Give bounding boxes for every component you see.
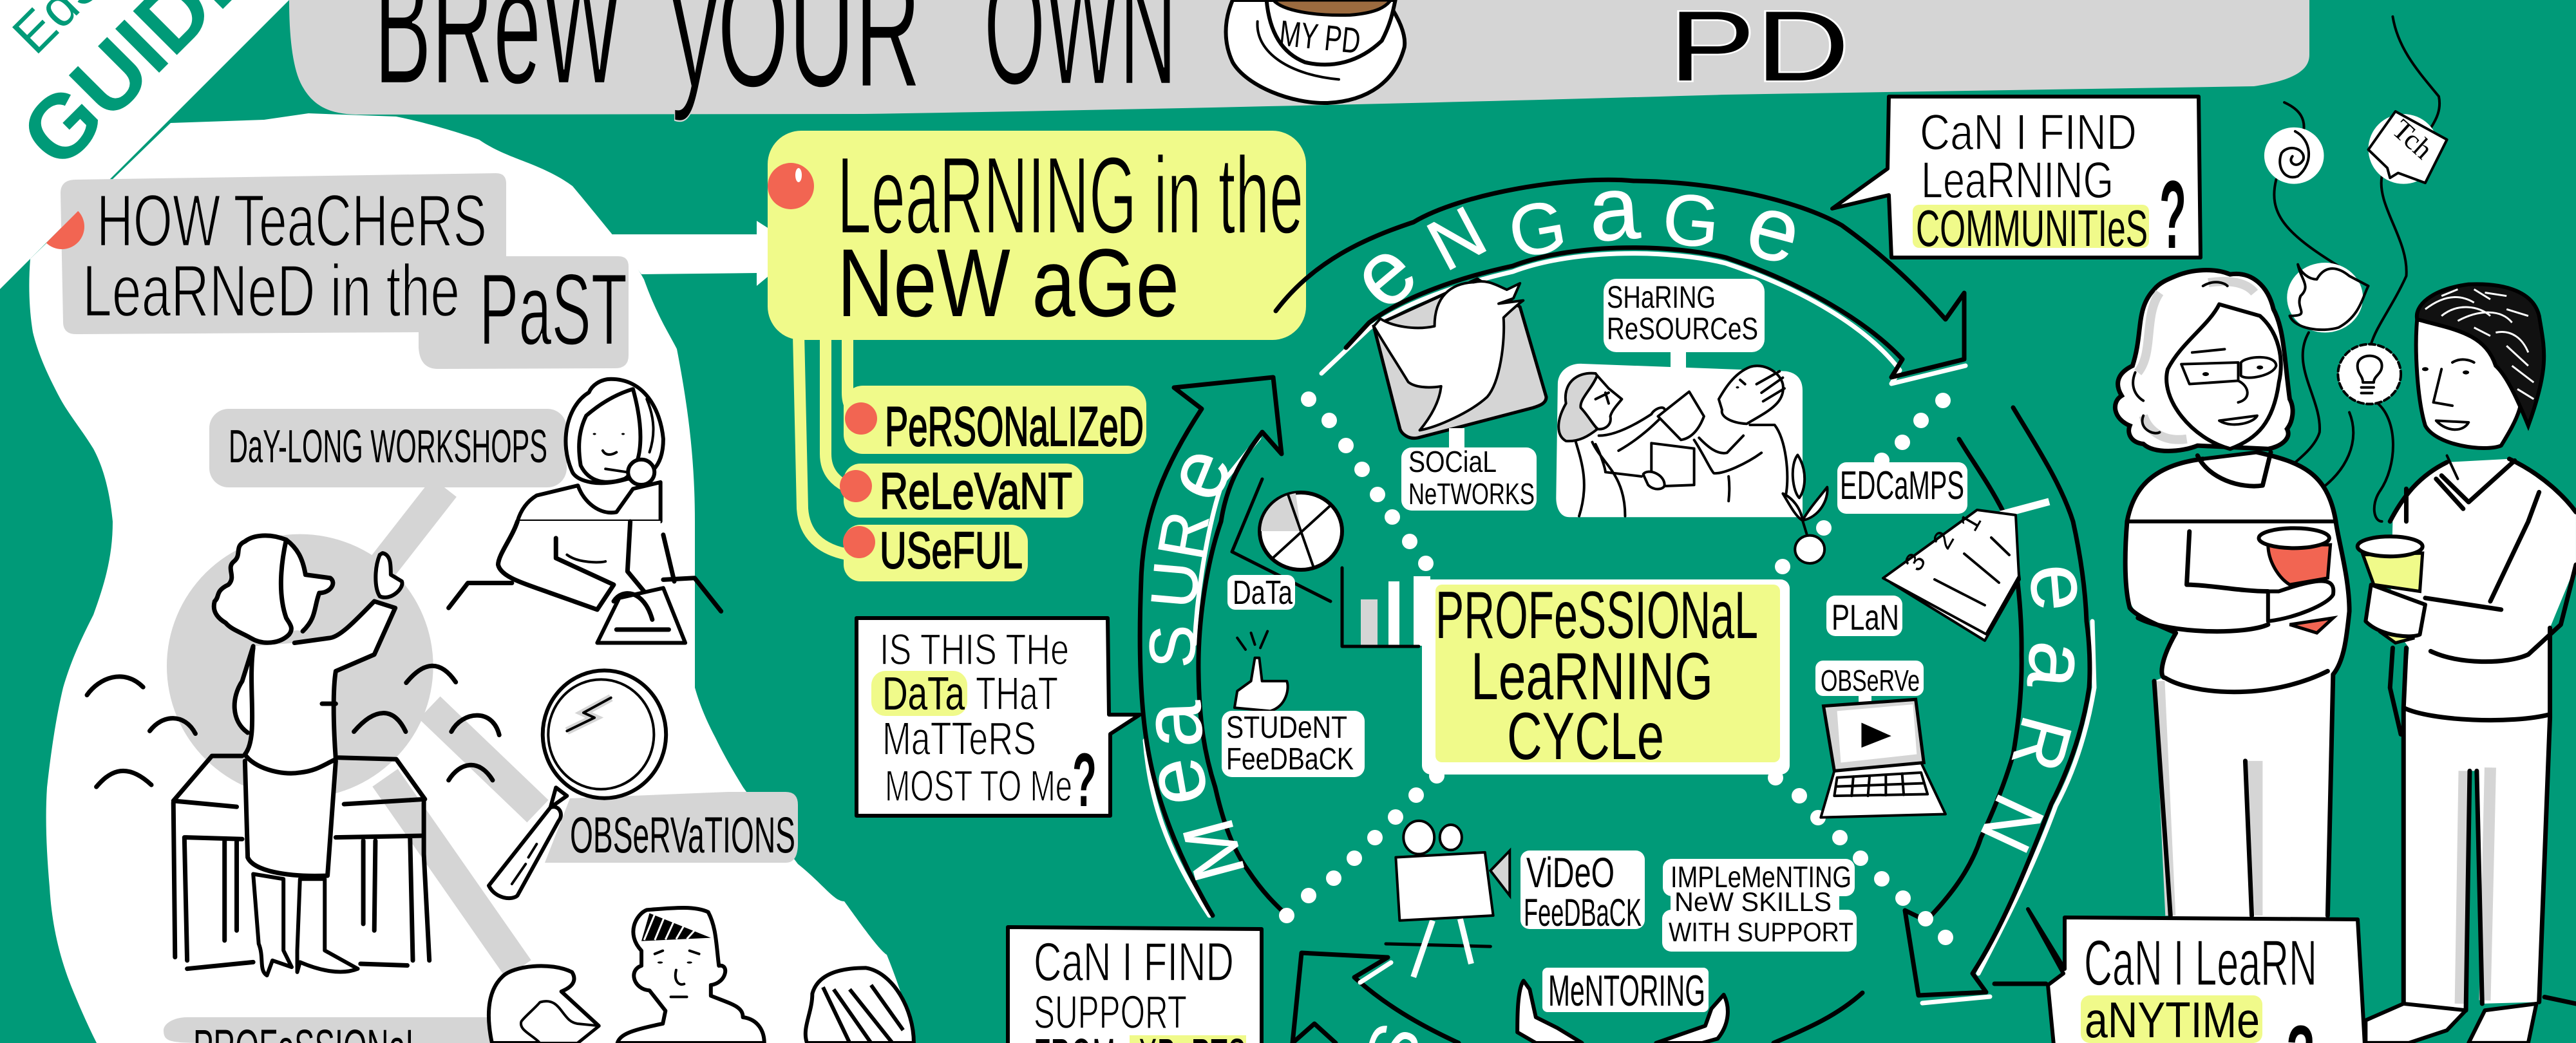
heading word past: PaST [479, 253, 627, 366]
list: useful [843, 522, 1028, 581]
arc letter a: a [1124, 699, 1220, 749]
arrow: past to new age [611, 221, 801, 286]
illustration: professional development audience [164, 908, 914, 1043]
student text: STUDeNT [1226, 711, 1347, 745]
feedback text: FeeDBaCK [1524, 891, 1642, 934]
question mark: ? [1072, 738, 1097, 823]
illustration: man holding yellow coffee cup [2358, 284, 2576, 1043]
label: implementing new skills with support [1662, 859, 1857, 952]
list: relevant [840, 462, 1083, 520]
heading: how teachers learned in the past [39, 173, 629, 369]
useful text: USeFUL [880, 522, 1023, 579]
line one: CaN I LeaRN [2084, 927, 2317, 999]
line two: LeaRNING [1921, 151, 2114, 209]
panel: professional learning cycle [1422, 578, 1790, 775]
icon: laptop with play button [1821, 699, 1946, 818]
label: data [1227, 574, 1295, 612]
icon: twitter tile [1374, 279, 1546, 438]
arc letter r: R [1996, 708, 2087, 780]
line three: MaTTeRS [882, 713, 1036, 765]
icons: floating social media bubbles with strings [2262, 17, 2447, 522]
grey circle behind teacher [167, 534, 433, 798]
label: day-long workshops [209, 409, 567, 487]
observations label [545, 792, 798, 863]
arc letter e: e [1332, 218, 1435, 328]
icon: numbered plan notebook [1883, 508, 2020, 641]
dotted cycle spokes [1279, 391, 1953, 945]
arrow: engage [1276, 156, 1965, 384]
arc letter a: a [1586, 156, 1643, 261]
line one: CaN I FIND [1034, 932, 1234, 992]
icon: video camera [1386, 821, 1510, 977]
bullet [840, 470, 872, 502]
line two: SUPPORT [1034, 987, 1187, 1038]
spiral bubble [2264, 127, 2324, 184]
callout: can i find support [1008, 927, 1262, 1043]
experts highlight [1130, 1035, 1246, 1043]
line three: COMMUNITIeS [1916, 200, 2148, 257]
line one: CaN I FIND [1920, 104, 2137, 160]
teacher figure [214, 536, 402, 975]
arc letter r: R [1144, 506, 1223, 565]
professional label [164, 1017, 489, 1043]
strings [2262, 17, 2439, 522]
cycle title line two: LeaRNING [1471, 639, 1713, 714]
word data: DaTa [882, 668, 965, 720]
new age heading line one: LeaRNING in the [837, 135, 1303, 257]
label: plan [1826, 596, 1902, 637]
video text: ViDeO [1526, 849, 1615, 896]
line two: NeW SKILLS [1674, 887, 1832, 917]
branches to list items [799, 335, 863, 555]
line four: MOST TO Me [885, 762, 1072, 811]
arrow: measure [1124, 377, 1289, 917]
illustration: two teachers sharing resources [1556, 364, 1803, 517]
arc letter e: e [1125, 751, 1226, 813]
red bullet [46, 211, 84, 249]
cycle title line three: CYCLe [1507, 699, 1664, 774]
illustration: mentoring hands [1517, 981, 1728, 1043]
banner: guide corner ribbon [0, 0, 289, 289]
panel: past learning white blob [29, 113, 914, 1043]
heading line one: HOW TeaCHeRS [97, 180, 487, 262]
social text: SOCiaL [1408, 445, 1497, 478]
arc letter u: U [1137, 558, 1213, 611]
desks [173, 756, 430, 969]
icon: sprout [1783, 455, 1828, 563]
label: student feedback [1222, 711, 1365, 777]
illustration: woman holding red coffee cup [2115, 270, 2349, 919]
tch speech bubble [2369, 111, 2447, 184]
resources text: ReSOURCeS [1607, 312, 1758, 346]
callout: can i learn anytime [1994, 909, 2365, 1043]
observe text: OBSeRVe [1821, 664, 1920, 697]
icon: coffee cup on saucer [1226, 0, 1405, 103]
mentoring text: MeNTORING [1548, 966, 1705, 1015]
data highlight [871, 671, 967, 716]
panel: learning in the new age [768, 131, 1306, 555]
callout: can i find learning communities [1832, 97, 2201, 268]
data text: DaTa [1233, 574, 1293, 612]
bird bubble [2287, 263, 2369, 332]
arc letter g: G [1660, 178, 1723, 263]
icon: pie chart [1232, 479, 1342, 601]
arc letter m: M [1167, 811, 1260, 890]
red bullet [768, 163, 814, 209]
callout: can i find learning communities: ? [2159, 160, 2186, 268]
arc letter l: L [1984, 489, 2072, 549]
audience heads [87, 666, 499, 787]
communities highlight [1913, 205, 2149, 248]
arc letter g: G [1503, 184, 1572, 274]
label: edcamps [1837, 462, 1967, 514]
callout: is this the data [857, 618, 1140, 823]
list: personalized [844, 386, 1146, 458]
label: mentoring [1542, 966, 1709, 1015]
new age heading line two: NeW aGe [837, 229, 1179, 337]
illustration: teacher on the phone [449, 379, 721, 643]
arc letter n: N [1415, 191, 1499, 286]
cup label: MY PD [1278, 12, 1363, 61]
arc letter a: a [2009, 638, 2107, 693]
edcamps text: EDCaMPS [1840, 464, 1964, 508]
networks text: NeTWORKS [1408, 477, 1535, 511]
illustration: magnifying glass with observations label [489, 670, 798, 898]
relevant text: ReLeVaNT [880, 462, 1072, 520]
word that: THaT [976, 668, 1058, 720]
label: sharing resources [1604, 279, 1765, 368]
personalized text: PeRSONaLIZeD [885, 396, 1144, 458]
anytime highlight [2081, 995, 2262, 1043]
tch label: Tch [2386, 113, 2439, 165]
label: video feedback [1520, 849, 1645, 934]
observations text: OBSeRVaTIONS [570, 806, 795, 863]
illustration: teacher at the front of a classroom [87, 534, 499, 975]
bullet [843, 526, 875, 558]
workshops text: DaY-LONG WORKSHOPS [229, 421, 547, 473]
bullet [845, 402, 877, 435]
cycle title line one: PROFeSSIONaL [1435, 578, 1758, 653]
step number one: 1 [1953, 508, 1987, 536]
heading line two: LeaRNeD in the [82, 250, 460, 332]
line three: WITH SUPPORT [1669, 917, 1853, 947]
arc letter s: S [1137, 625, 1209, 668]
arc letter n: N [1965, 783, 2060, 864]
arrow: support [1293, 953, 1862, 1043]
line one: IMPLeMeNTING [1671, 860, 1852, 894]
title panel [289, 0, 2309, 123]
lightbulb bubble [2338, 344, 2401, 404]
arc letter e: e [1737, 173, 1812, 284]
plan text: PLaN [1832, 597, 1899, 637]
label: social networks [1401, 428, 1537, 511]
step number three: 3 [1898, 548, 1931, 576]
grey connectors from teacher circle [380, 487, 538, 969]
icon: bar chart [1342, 568, 1430, 646]
feedback text: FeeDBaCK [1226, 742, 1354, 776]
arrow: learn [1905, 408, 2110, 1003]
sharing text: SHaRING [1607, 281, 1716, 315]
arc letter e: e [1146, 434, 1250, 512]
label: observe [1815, 661, 1924, 702]
step number two: 2 [1926, 526, 1960, 554]
line one: IS THIS THe [880, 625, 1069, 674]
icon: thumbs up [1235, 631, 1288, 711]
arc letter e: e [2012, 560, 2110, 614]
